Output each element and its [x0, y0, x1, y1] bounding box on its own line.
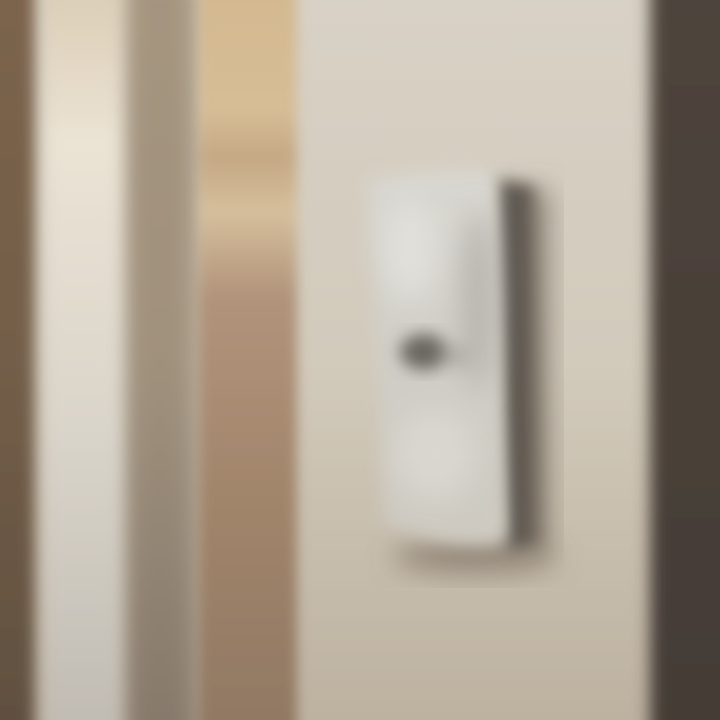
band: dark right edge	[650, 0, 720, 720]
plate mottling	[384, 200, 494, 500]
device front plate	[368, 170, 506, 543]
device side face	[495, 178, 540, 550]
door frame: vertical bands	[0, 0, 297, 720]
switch knob	[400, 334, 468, 370]
band: bright light strip	[44, 0, 122, 720]
shadow right of device	[522, 190, 550, 550]
device: wall switch	[368, 170, 540, 550]
band: taupe frame	[120, 0, 200, 720]
band: tan door panel	[199, 0, 297, 720]
shadow under device	[393, 540, 557, 572]
band: dark brown left edge	[0, 0, 36, 720]
